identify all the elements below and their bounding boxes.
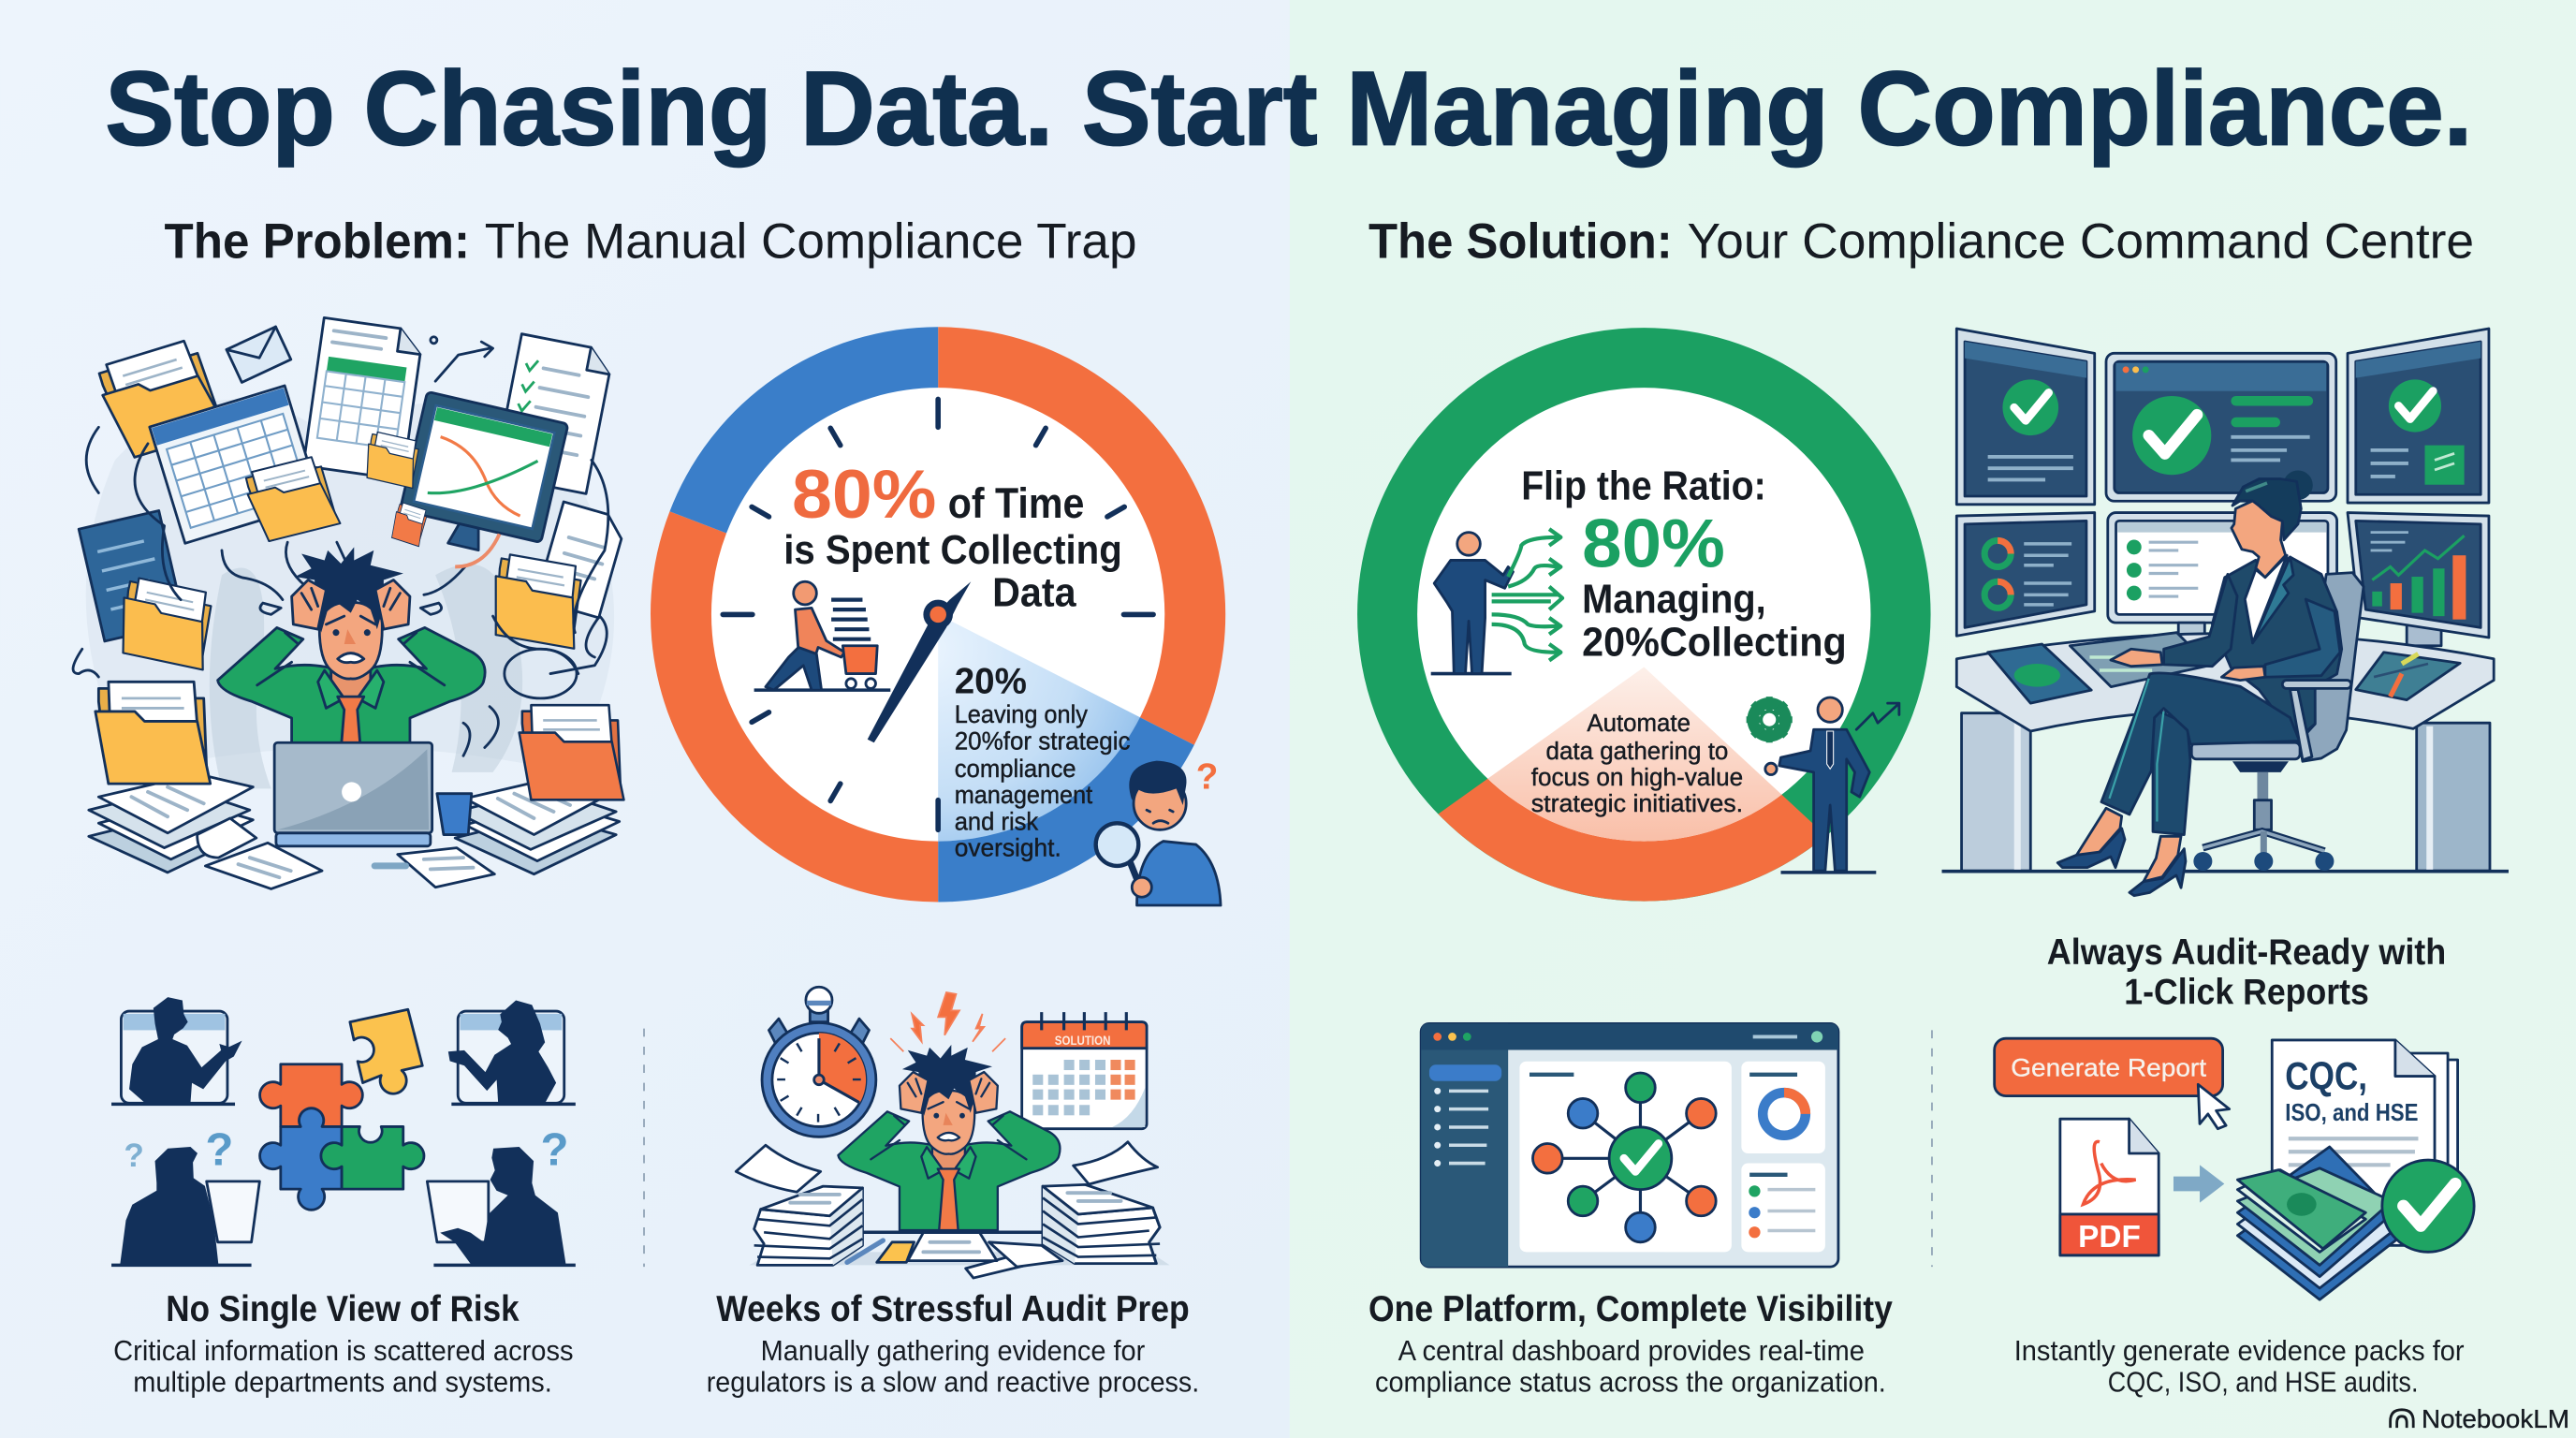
icon: orange folder	[520, 705, 623, 800]
dashboard list panel	[1741, 1164, 1825, 1252]
face	[2232, 501, 2286, 578]
text: automate data gathering: focus on high-value	[1531, 763, 1743, 791]
text: 80 percent of time: Data	[992, 570, 1076, 616]
icon: PDF document	[2060, 1119, 2159, 1255]
monitor: top left	[1956, 329, 2095, 505]
near hand	[2221, 667, 2265, 681]
text: instantly generate evidence: Instantly generate evidence packs for	[2014, 1334, 2465, 1367]
text: 20 percent strategic: 20%	[955, 662, 1027, 702]
divider	[643, 1029, 645, 1267]
dashboard network panel	[1519, 1062, 1732, 1252]
text: 80 percent managing: 20%Collecting	[1582, 619, 1847, 665]
illustration: central dashboard	[1421, 1023, 1838, 1267]
icon: paper roll	[198, 818, 256, 858]
near arm	[2265, 599, 2340, 677]
heading: always audit-ready: Always Audit-Ready with	[2047, 932, 2446, 973]
icon: stress lightning bolts	[890, 992, 1005, 1051]
icon: left stacked papers	[754, 1186, 862, 1265]
ring segment: orange	[938, 358, 1195, 731]
icon: report stack	[2272, 1040, 2458, 1245]
icon: document right	[535, 502, 627, 618]
figure: woman at the console	[2057, 470, 2351, 896]
text: 80 percent of time: of Time	[948, 479, 1084, 527]
monitor: bottom right	[2348, 513, 2489, 646]
monitor: top right	[2348, 329, 2489, 503]
heading: the solution: The Solution:	[1368, 214, 1673, 270]
chart: 80/20 clock ring	[681, 358, 1221, 905]
dashboard donut panel	[1741, 1062, 1825, 1153]
clock hand	[868, 581, 971, 742]
puzzle piece: yellow	[350, 1009, 422, 1093]
dashboard sidebar	[1421, 1023, 1508, 1267]
figure: stressed reviewer	[838, 1045, 1060, 1230]
text: no single view of risk: multiple departments and systems.	[133, 1366, 552, 1399]
logo: NotebookLM: NotebookLM	[2422, 1404, 2569, 1433]
icon: blue panel	[79, 510, 184, 641]
button: generate report: Generate Report	[2011, 1053, 2207, 1082]
ring segment: orange	[1438, 779, 1812, 902]
icon: arrows and squiggles	[73, 337, 608, 756]
figure: puzzled analyst with magnifier	[1096, 756, 1221, 905]
text: one platform complete visibility: compliance status across the organization.	[1375, 1366, 1886, 1399]
figure: top-left colleague	[111, 997, 242, 1104]
armrest	[2282, 681, 2351, 760]
text: automate data gathering: Automate	[1587, 709, 1690, 737]
far arm	[2164, 574, 2237, 667]
icon: flying pages	[736, 1145, 821, 1192]
text: weeks of stressful audit prep: regulators is a slow and reactive process.	[707, 1366, 1199, 1399]
blazer	[2212, 557, 2342, 740]
desk surface	[749, 1252, 1170, 1265]
icon: left paper stack	[89, 774, 253, 873]
back leg	[2153, 712, 2190, 835]
chart segment: 20 percent wedge	[938, 614, 1140, 842]
figure: bottom-left colleague: ?	[205, 1124, 233, 1175]
text: 20 percent strategic: 20%for strategic	[955, 726, 1131, 755]
text: 80 percent managing	[1582, 504, 1847, 665]
text: one platform complete visibility: A central dashboard provides real-time	[1398, 1334, 1865, 1367]
icon: loose papers	[205, 843, 494, 888]
heading: the problem	[165, 214, 1137, 270]
text: 20 percent strategic: compliance	[955, 754, 1076, 783]
icon: calendar	[1022, 1012, 1147, 1129]
text: 20 percent strategic: and risk	[955, 806, 1039, 835]
monitor: top centre	[2106, 353, 2336, 501]
hair	[2232, 470, 2313, 540]
puzzle piece: blue	[260, 1108, 342, 1210]
button: generate report	[1995, 1038, 2223, 1096]
heading: the solution: Your Compliance Command Centre	[1687, 214, 2474, 270]
icon: right paper stack	[455, 775, 620, 874]
icon: spreadsheet window	[150, 386, 320, 543]
text: instantly generate evidence	[2014, 1334, 2465, 1399]
text: 20 percent strategic: management	[955, 780, 1093, 809]
text: one platform complete visibility: One Platform, Complete Visibility	[1368, 1289, 1893, 1329]
text: 80 percent of time	[783, 455, 1122, 616]
clock face	[708, 385, 1168, 844]
text: weeks of stressful audit prep: Weeks of Stressful Audit Prep	[716, 1289, 1190, 1329]
icon: central report	[847, 1233, 1062, 1278]
text: 20 percent strategic: Leaving only	[955, 699, 1088, 728]
text: 20 percent strategic: oversight.	[955, 832, 1061, 861]
icon: envelope	[227, 327, 291, 382]
text: automate data gathering: data gathering to	[1546, 737, 1728, 765]
illustration: no single view of risk	[111, 997, 576, 1265]
text: 20 percent strategic	[955, 662, 1131, 861]
ring segment: orange lower	[681, 522, 938, 872]
lapel	[2253, 557, 2293, 643]
figure: bottom-left colleague: ?	[124, 1137, 144, 1174]
icon: right stacked papers	[1043, 1184, 1160, 1264]
ring segment: blue upper	[698, 358, 938, 522]
illustration: overwhelmed worker surrounded by files	[73, 317, 627, 888]
text: 80 percent of time: 80%	[792, 455, 936, 533]
chart: flip the ratio ring	[1290, 359, 1917, 920]
icon: puzzle pieces	[260, 1009, 424, 1210]
icon: document with list	[494, 334, 614, 493]
icon: laptop	[274, 742, 432, 846]
shirt	[2245, 555, 2287, 643]
icon: cursor	[2198, 1084, 2230, 1129]
icon: large yellow folder	[95, 682, 211, 784]
icon: yellow folder left	[113, 576, 219, 669]
icon: PDF document: PDF	[2078, 1220, 2141, 1255]
figure: bottom-right colleague	[427, 1124, 576, 1265]
background: solution side	[1290, 0, 2576, 1438]
ring: green	[1388, 359, 1900, 871]
text: 80 percent managing: 80%	[1582, 504, 1725, 581]
figure: stressed worker	[218, 547, 485, 770]
icon: arrow	[2174, 1165, 2224, 1203]
monitor: bottom left	[1956, 513, 2095, 636]
icon: person pushing cart of files	[754, 581, 890, 690]
text: no single view of risk: Critical information is scattered across	[113, 1334, 574, 1367]
clock ticks	[723, 399, 1153, 829]
inner face	[1417, 388, 1871, 842]
figure: top-right colleague	[448, 1000, 576, 1104]
text: automate data gathering: strategic initiatives.	[1531, 789, 1743, 817]
icon: green check badge	[2382, 1160, 2474, 1252]
heading: always audit-ready	[2047, 932, 2446, 1012]
icon: calendar: SOLUTION	[1055, 1033, 1110, 1048]
desk edge	[862, 1231, 1042, 1233]
divider	[1931, 1030, 1933, 1267]
icon: yellow folder centre	[242, 454, 340, 543]
text: weeks of stressful audit prep	[707, 1289, 1199, 1399]
icon: top-left folder	[95, 336, 227, 461]
figure: manager with gear and growth arrow	[1747, 697, 1899, 873]
icon: report stack: ISO, and HSE	[2285, 1100, 2418, 1126]
chair	[2191, 573, 2364, 871]
feet and shoes	[2057, 808, 2186, 896]
text: no single view of risk: No Single View of Risk	[166, 1289, 520, 1329]
title: Stop Chasing Data. Start Managing Compliance.	[105, 49, 2472, 167]
dashboard top bar	[1421, 1023, 1838, 1049]
floor line	[1942, 871, 2509, 873]
icon: report stack: CQC,	[2285, 1054, 2367, 1098]
heading: always audit-ready: 1-Click Reports	[2124, 972, 2369, 1012]
figure: bottom-right colleague: ?	[541, 1124, 569, 1175]
text: automate data gathering	[1531, 709, 1743, 817]
puzzle piece: orange	[260, 1064, 362, 1126]
icon: small folders	[361, 431, 423, 488]
icon: spreadsheet document	[303, 317, 423, 479]
wedge: light peach	[1487, 667, 1781, 842]
desk console	[1956, 633, 2494, 731]
far hand	[2111, 649, 2162, 667]
text: 80 percent managing: Managing,	[1582, 577, 1766, 623]
front leg	[2101, 673, 2300, 814]
icon: mug	[437, 794, 472, 835]
figure: puzzled analyst with magnifier: ?	[1196, 756, 1218, 797]
puzzle piece: green	[321, 1126, 424, 1189]
text: no single view of risk	[113, 1289, 574, 1399]
desk legs	[1962, 713, 2490, 871]
text: 80 percent of time: is Spent Collecting	[783, 527, 1122, 573]
text: weeks of stressful audit prep: Manually gathering evidence for	[761, 1334, 1145, 1367]
heading: the problem: The Manual Compliance Trap	[485, 214, 1137, 270]
monitor: bottom centre	[2108, 513, 2337, 636]
text: flip the ratio: Flip the Ratio:	[1521, 463, 1766, 509]
icon: stack of evidence notes	[2237, 1147, 2402, 1299]
icon: monitor with chart	[395, 391, 568, 564]
illustration: one-click report	[1995, 1038, 2474, 1299]
icon: stopwatch	[762, 987, 876, 1137]
figure: manager directing arrows	[1431, 529, 1562, 674]
figure: bottom-left colleague	[111, 1124, 259, 1265]
ring segment: blue	[938, 731, 1167, 872]
illustration: stressful audit prep	[736, 987, 1170, 1278]
heading: the problem: The Problem:	[165, 214, 470, 270]
text: one platform complete visibility	[1368, 1289, 1893, 1399]
illustration: command centre with monitors	[1942, 329, 2509, 896]
text: instantly generate evidence: CQC, ISO, and HSE audits.	[2108, 1366, 2418, 1399]
background: problem side	[0, 0, 1290, 1438]
icon: yellow folder right	[486, 552, 588, 649]
